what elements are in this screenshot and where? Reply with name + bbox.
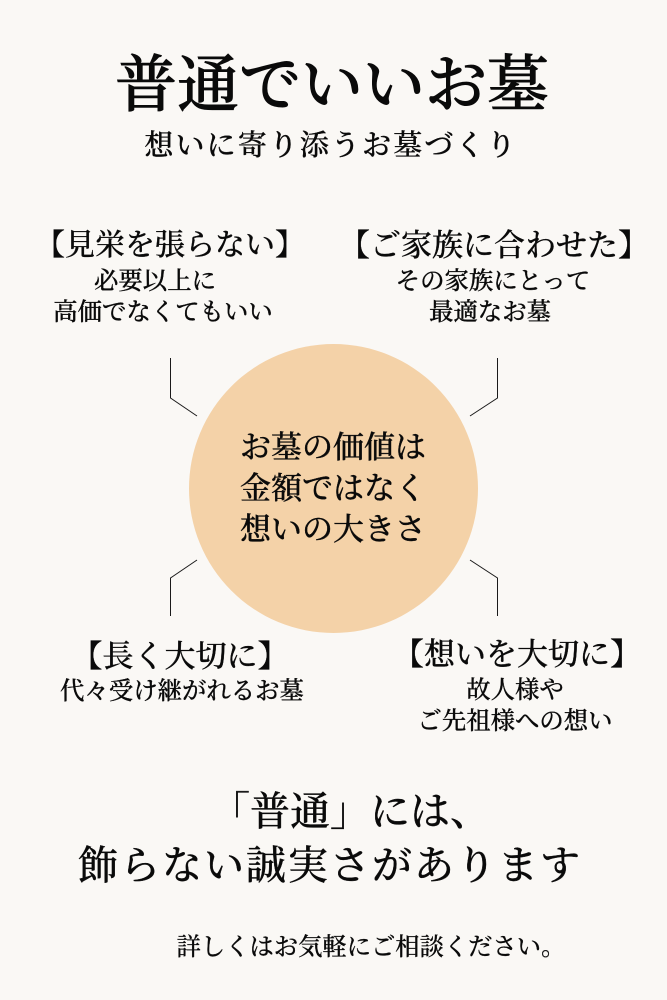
heading: top right: 【ご家族に合わせた】 [339, 228, 649, 263]
subtitle: 想いに寄り添うお墓づくり [144, 130, 518, 162]
closing message [78, 789, 582, 888]
text: bottom right line 2: ご先祖様への想い [417, 708, 613, 735]
text: bottom left: 代々受け継がれるお墓 [60, 678, 304, 705]
closing line 2: 飾らない誠実さがあります [78, 843, 582, 888]
heading: top left: 【見栄を張らない】 [35, 229, 305, 262]
central circle [189, 344, 478, 633]
text: top left line 1: 必要以上に [94, 268, 216, 295]
text: top left line 2: 高価でなくてもいい [53, 299, 273, 326]
title: 普通でいいお墓 [115, 52, 549, 120]
circle text [240, 430, 426, 547]
panel: top left [35, 229, 305, 326]
circle text: お墓の価値は [240, 430, 426, 465]
text: bottom right line 1: 故人様や [466, 677, 564, 704]
circle text: 金額ではなく [240, 471, 426, 506]
heading: bottom left: 【長く大切に】 [72, 639, 288, 674]
panel: top right [339, 228, 649, 326]
text: top right line 1: その家族にとって [396, 268, 590, 295]
heading: bottom right: 【想いを大切に】 [393, 637, 641, 672]
panel: bottom right [393, 637, 641, 735]
text: top right line 2: 最適なお墓 [429, 299, 551, 326]
panel: bottom left [60, 639, 304, 705]
closing line 1: 「普通」には、 [210, 789, 490, 834]
footer note: 詳しくはお気軽にご相談ください。 [177, 934, 565, 961]
circle text: 想いの大きさ [240, 512, 426, 547]
